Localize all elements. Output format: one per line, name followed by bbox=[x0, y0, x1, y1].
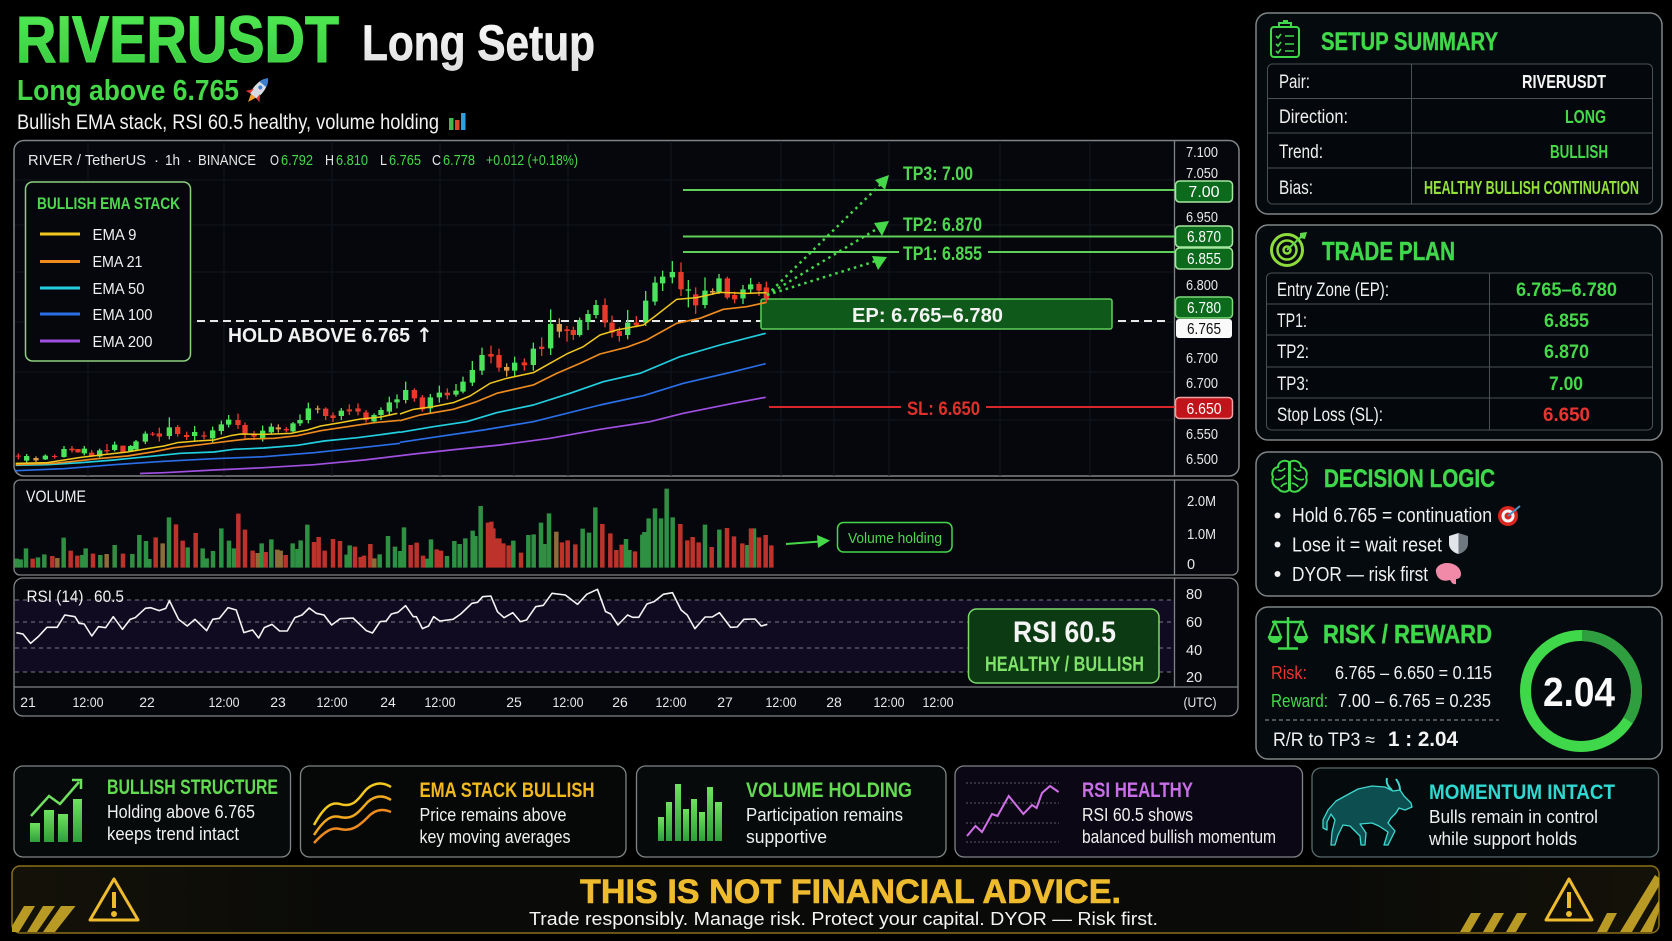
icon: bull bbox=[1323, 778, 1412, 845]
price badge 6.855 bbox=[1176, 248, 1232, 269]
time axis labels: (UTC) bbox=[1184, 694, 1216, 710]
time axis labels: 12:00 bbox=[874, 694, 905, 710]
table: trade plan: 6.765–6.780 bbox=[1516, 279, 1617, 301]
icon: RSI sparkline bbox=[966, 783, 1059, 842]
chart header: H bbox=[325, 152, 334, 169]
disclaimer subtext: Trade responsibly. Manage risk. Protect your capital. DYOR — Risk first. bbox=[529, 909, 1158, 929]
callout: volume holding bbox=[838, 522, 952, 552]
card: RSI healthy: balanced bullish momentum bbox=[1082, 827, 1276, 847]
icon: volume bars bbox=[658, 784, 722, 841]
card: EMA stack bullish: Price remains above bbox=[420, 805, 566, 825]
icon: target bbox=[1272, 232, 1307, 266]
label: RSI value bbox=[26, 587, 124, 606]
table: trade plan: TP3: bbox=[1277, 374, 1309, 395]
chart header: O bbox=[270, 152, 279, 169]
title: RIVERUSDT bbox=[16, 2, 339, 76]
price axis labels: 6.550 bbox=[1186, 427, 1218, 443]
ratio line bbox=[1273, 728, 1458, 751]
icon: warning left bbox=[90, 879, 138, 920]
price badge 6.650 bbox=[1176, 398, 1232, 418]
time axis labels: 25 bbox=[506, 694, 522, 710]
legend: bullish EMA stack: EMA 9 bbox=[92, 227, 137, 244]
time axis labels: 12:00 bbox=[208, 694, 240, 710]
title bbox=[16, 2, 595, 76]
arrow: volume holding bbox=[786, 535, 830, 548]
card: momentum intact: while support holds bbox=[1428, 829, 1577, 849]
card: bullish structure: Holding above 6.765 bbox=[107, 802, 255, 822]
time axis labels: 12:00 bbox=[72, 694, 104, 710]
card: bullish structure: keeps trend intact bbox=[107, 824, 239, 844]
card: EMA stack bullish: key moving averages bbox=[420, 827, 570, 847]
banner: disclaimer bbox=[12, 866, 1659, 933]
entry zone box bbox=[761, 299, 1112, 329]
chart header: 6.778 bbox=[443, 152, 475, 169]
RSI line bbox=[16, 589, 767, 643]
panel: decision logic bbox=[1256, 452, 1662, 596]
take profit lines bbox=[683, 190, 1175, 252]
icon: EMA waves bbox=[314, 784, 391, 843]
table: summary: LONG bbox=[1565, 106, 1606, 127]
RSI axis labels: 80 bbox=[1186, 587, 1202, 603]
price badge 6.765 bbox=[1176, 319, 1232, 338]
card: bullish structure: BULLISH STRUCTURE bbox=[107, 776, 278, 799]
callout: RSI 60.5: RSI 60.5 bbox=[1013, 616, 1116, 649]
table: trade plan: TP1: bbox=[1277, 311, 1307, 332]
label: hold above: HOLD ABOVE 6.765 bbox=[228, 325, 410, 347]
gauge: 2.04 ring bbox=[1526, 636, 1637, 746]
label: TP1: TP1: 6.855 bbox=[903, 244, 982, 265]
chart grid bbox=[15, 141, 1174, 476]
arrow: to TP1 bbox=[767, 256, 887, 295]
panel: trade plan bbox=[1256, 225, 1662, 440]
price badge 6.765: 6.765 bbox=[1187, 321, 1221, 338]
time axis labels: 27 bbox=[717, 694, 733, 710]
price axis labels: 6.800 bbox=[1186, 278, 1218, 294]
icon: clipboard bbox=[1271, 21, 1299, 57]
card: EMA stack bullish bbox=[300, 766, 626, 857]
risk formula: Risk: bbox=[1271, 662, 1307, 683]
EMA 50 line bbox=[16, 333, 766, 465]
RSI axis labels bbox=[1186, 587, 1202, 686]
gauge: 2.04 ring: 2.04 bbox=[1543, 669, 1615, 715]
card: RSI healthy bbox=[955, 766, 1302, 857]
bullets: DYOR — risk first bbox=[1292, 564, 1428, 586]
icon: brain outline bbox=[1272, 461, 1307, 492]
icon: scales bbox=[1269, 617, 1307, 648]
chart header: +0.012 (+0.18%) bbox=[486, 152, 578, 169]
candlesticks bbox=[18, 261, 766, 463]
arrow: to TP2 bbox=[767, 221, 889, 295]
table: summary: RIVERUSDT bbox=[1522, 71, 1607, 92]
table: trade plan bbox=[1266, 273, 1652, 430]
time axis labels: 23 bbox=[270, 694, 286, 710]
chart header: BINANCE bbox=[198, 152, 256, 169]
chart header: 6.792 bbox=[281, 152, 313, 169]
time axis labels: 21 bbox=[20, 694, 36, 710]
time axis labels: 12:00 bbox=[316, 694, 348, 710]
time axis labels: 12:00 bbox=[922, 694, 954, 710]
chart header: 1h bbox=[165, 152, 180, 169]
reward formula bbox=[1271, 690, 1491, 711]
panel: price chart bbox=[14, 140, 1239, 476]
icon: warning right bbox=[1546, 879, 1592, 920]
EMA 200 line bbox=[140, 397, 766, 474]
EMA 21 line bbox=[16, 302, 767, 465]
panel: setup summary bbox=[1256, 13, 1662, 214]
table: summary: Trend: bbox=[1279, 142, 1323, 163]
time axis labels: 12:00 bbox=[656, 694, 687, 710]
volume bars bbox=[17, 489, 771, 568]
heading: trade plan: TRADE PLAN bbox=[1322, 236, 1455, 266]
panel: risk reward bbox=[1256, 607, 1662, 759]
entry zone box: EP: 6.765–6.780 bbox=[852, 305, 1003, 327]
chart header: 6.810 bbox=[336, 152, 368, 169]
EMA 100 line bbox=[16, 364, 766, 471]
table: summary bbox=[1268, 64, 1652, 204]
volume axis labels: 2.0M bbox=[1187, 494, 1216, 510]
time axis labels: 12:00 bbox=[424, 694, 456, 710]
icon: target emoji bbox=[1498, 506, 1520, 526]
price axis divider bbox=[1174, 141, 1176, 476]
volume axis labels: 0 bbox=[1187, 557, 1195, 573]
icon: rocket bbox=[241, 72, 275, 108]
price badge 6.780 bbox=[1176, 297, 1232, 318]
reward formula: 7.00 – 6.765 = 0.235 bbox=[1338, 690, 1491, 711]
time axis labels: 28 bbox=[826, 694, 842, 710]
risk formula bbox=[1271, 662, 1492, 683]
price axis labels: 6.500 bbox=[1186, 452, 1218, 468]
panel: RSI bbox=[14, 578, 1238, 716]
table: trade plan: TP2: bbox=[1277, 342, 1309, 363]
card: volume holding: Participation remains bbox=[746, 805, 903, 825]
legend: bullish EMA stack bbox=[26, 182, 190, 361]
price badge 6.870: 6.870 bbox=[1187, 229, 1221, 246]
chart header: RIVER / TetherUS bbox=[28, 152, 146, 169]
card: volume holding bbox=[636, 766, 946, 857]
text: summary line: Bullish EMA stack, RSI 60.5 healthy, volume holding bbox=[17, 111, 439, 134]
label: volume: VOLUME bbox=[26, 487, 86, 506]
RSI band bbox=[15, 600, 1174, 672]
arrow: to TP3 bbox=[767, 175, 889, 295]
table: trade plan: 6.870 bbox=[1544, 341, 1589, 363]
card: bullish structure bbox=[14, 766, 290, 857]
ratio line: 1 : 2.04 bbox=[1388, 728, 1458, 751]
legend: bullish EMA stack: EMA 21 bbox=[92, 254, 143, 271]
label: TP2: TP2: 6.870 bbox=[903, 215, 982, 236]
heading: setup summary: SETUP SUMMARY bbox=[1321, 28, 1498, 56]
price badge 6.870 bbox=[1176, 226, 1232, 247]
chart header: L bbox=[380, 152, 387, 169]
label: RSI value: RSI (14) bbox=[26, 587, 84, 606]
card: momentum intact: Bulls remain in control bbox=[1429, 807, 1598, 827]
table: trade plan: Entry Zone (EP): bbox=[1277, 280, 1389, 301]
card: RSI healthy: RSI HEALTHY bbox=[1082, 779, 1193, 802]
time axis labels bbox=[20, 694, 1216, 710]
callout: RSI 60.5 bbox=[968, 609, 1159, 683]
table: summary: BULLISH bbox=[1550, 141, 1608, 162]
chart header: · bbox=[154, 152, 159, 169]
table: summary: Bias: bbox=[1279, 178, 1313, 199]
RSI axis labels: 40 bbox=[1186, 643, 1202, 659]
disclaimer heading: THIS IS NOT FINANCIAL ADVICE. bbox=[580, 873, 1121, 911]
subtitle: long above: Long above 6.765 bbox=[17, 75, 239, 107]
volume axis labels: 1.0M bbox=[1187, 527, 1216, 543]
ratio line: R/R to TP3 ≈ bbox=[1273, 730, 1375, 751]
card: volume holding: supportive bbox=[746, 827, 827, 847]
price badge 6.780: 6.780 bbox=[1187, 300, 1221, 317]
icon: rising bars bbox=[30, 780, 82, 842]
label: hold above: ↑ bbox=[416, 323, 433, 347]
price badge 6.855: 6.855 bbox=[1187, 251, 1221, 268]
hazard stripes left bbox=[12, 906, 76, 932]
icon: bar chart emoji bbox=[449, 113, 466, 130]
stop loss line bbox=[769, 406, 1175, 408]
hold line bbox=[197, 320, 1165, 322]
label: RSI value: 60.5 bbox=[94, 587, 124, 606]
panel: volume bbox=[14, 480, 1238, 575]
label: SL: SL: 6.650 bbox=[907, 399, 980, 420]
legend: bullish EMA stack: EMA 50 bbox=[92, 281, 145, 298]
callout: volume holding: Volume holding bbox=[848, 530, 942, 547]
time axis labels: 12:00 bbox=[552, 694, 584, 710]
bullets: Lose it = wait reset bbox=[1292, 534, 1442, 556]
callout: RSI 60.5: HEALTHY / BULLISH bbox=[985, 653, 1144, 676]
price badge 6.650: 6.650 bbox=[1186, 401, 1222, 418]
chart header: · bbox=[187, 152, 192, 169]
card: RSI healthy: RSI 60.5 shows bbox=[1082, 805, 1193, 825]
bullets bbox=[1274, 505, 1520, 586]
icon: shield emoji bbox=[1449, 533, 1468, 554]
RSI axis labels: 60 bbox=[1186, 615, 1202, 631]
price axis labels: 6.700 bbox=[1186, 351, 1218, 367]
RSI axis labels: 20 bbox=[1186, 670, 1202, 686]
legend: bullish EMA stack: BULLISH EMA STACK bbox=[37, 194, 181, 213]
heading: decision logic: DECISION LOGIC bbox=[1324, 465, 1495, 493]
legend: bullish EMA stack: EMA 200 bbox=[92, 334, 153, 351]
price axis labels: 6.950 bbox=[1186, 210, 1218, 226]
title: Long Setup bbox=[362, 15, 595, 71]
price axis labels bbox=[1186, 145, 1218, 468]
price axis labels: 7.050 bbox=[1186, 166, 1218, 182]
card: EMA stack bullish: EMA STACK BULLISH bbox=[420, 779, 594, 802]
chart header bbox=[28, 152, 578, 169]
volume axis labels bbox=[1187, 494, 1216, 573]
chart header: 6.765 bbox=[389, 152, 421, 169]
price axis labels: 6.700 bbox=[1186, 376, 1218, 392]
time axis labels: 22 bbox=[139, 694, 155, 710]
icon: brain emoji bbox=[1436, 563, 1461, 584]
price badge 7.00: 7.00 bbox=[1188, 184, 1220, 201]
table: trade plan: 6.650 bbox=[1543, 404, 1590, 426]
EMA 9 line bbox=[16, 292, 767, 463]
price badge 7.00 bbox=[1176, 181, 1232, 202]
price axis labels: 7.100 bbox=[1186, 145, 1218, 161]
card: momentum intact bbox=[1312, 768, 1658, 857]
time axis labels: 24 bbox=[380, 694, 396, 710]
bullets: Hold 6.765 = continuation bbox=[1292, 505, 1492, 527]
legend: bullish EMA stack: EMA 100 bbox=[92, 307, 153, 324]
table: trade plan: 7.00 bbox=[1549, 373, 1583, 395]
table: trade plan: Stop Loss (SL): bbox=[1277, 405, 1383, 426]
label: TP3: TP3: 7.00 bbox=[903, 164, 973, 185]
table: summary: Direction: bbox=[1279, 107, 1348, 128]
time axis labels: 26 bbox=[612, 694, 628, 710]
table: summary: Pair: bbox=[1279, 72, 1310, 93]
table: trade plan: 6.855 bbox=[1544, 310, 1589, 332]
time axis labels: 12:00 bbox=[766, 694, 797, 710]
reward formula: Reward: bbox=[1271, 690, 1328, 711]
risk formula: 6.765 – 6.650 = 0.115 bbox=[1335, 662, 1492, 683]
chart header: C bbox=[432, 152, 441, 169]
card: volume holding: VOLUME HOLDING bbox=[746, 779, 912, 802]
hazard stripes right bbox=[1460, 875, 1659, 932]
card: momentum intact: MOMENTUM INTACT bbox=[1429, 781, 1615, 804]
heading: risk reward: RISK / REWARD bbox=[1323, 619, 1492, 649]
